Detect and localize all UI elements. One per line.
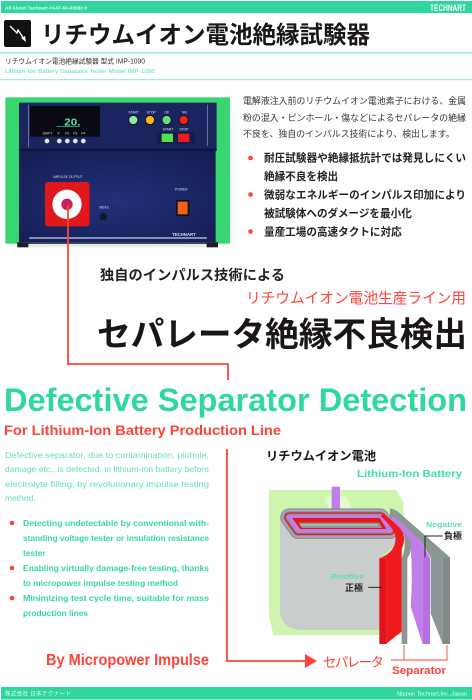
photo: tester on green background: START (163, 127, 173, 131)
feature bullets English: Minimizing test cycle time, suitable for mass (23, 593, 209, 603)
English intro text: method. (5, 493, 36, 503)
photo: tester on green background: POWER (175, 188, 188, 192)
photo: tester on green background: MEAS (99, 206, 110, 210)
label: negative electrode: Negative (426, 520, 462, 529)
photo: tester on green background: F3 (73, 132, 77, 136)
photo: tester on green background: F2 (65, 132, 69, 136)
feature bullets English: Enabling virtually damage-free testing, thanks (23, 563, 209, 573)
red connector line to separator heading (68, 205, 228, 380)
label: positive electrode: 正極 (345, 582, 363, 593)
model name: Lithium-Ion Battery Separator Tester Model IMP-1090 (5, 69, 155, 75)
English subheading: For Lithium-Ion Battery Production Line (4, 423, 282, 438)
feature bullets Japanese (248, 152, 466, 238)
feature bullets Japanese: 絶縁不良を検出 (264, 170, 338, 183)
intro text: 粉の混入・ピンホール・傷などによるセパレータの絶縁 (243, 112, 466, 123)
feature bullets English: Detecting undetectable by conventional with- (23, 518, 209, 528)
header band: All About Technart #AAT-50-00082 0 (5, 6, 87, 10)
photo: tester on green background: SHIFT (43, 132, 52, 136)
photo: tester on green background: STOP (179, 127, 189, 131)
photo: tester on green background: NG (182, 110, 187, 114)
feature bullets English: production lines (23, 608, 88, 618)
intro text (243, 95, 466, 139)
icon: lightning bolt (4, 20, 31, 47)
English intro text: Defective separator, due to contamination, pinhole, (5, 450, 209, 460)
photo: tester on green background: F (58, 132, 60, 136)
footer band: 株式会社 日本テクナート (5, 690, 71, 698)
photo: tester on green background: OK (164, 110, 170, 114)
main Japanese heading: セパレータ絶縁不良検出 (97, 316, 467, 354)
feature bullets English: tester (23, 548, 46, 558)
English intro text: damage etc., is detected, in lithium-ion battery before (5, 464, 209, 474)
feature bullets Japanese: 被試験体へのダメージを最小化 (264, 207, 412, 220)
intro text: 不良を、独自のインパルス技術により、検出します。 (243, 128, 455, 139)
label: separator Japanese: セパレータ (323, 655, 384, 670)
arrow to separator label (227, 449, 317, 668)
battery heading Japanese: リチウムイオン電池 (266, 448, 376, 463)
feature bullets Japanese: 耐圧試験器や絶縁抵抗計では発見しにくい (264, 152, 466, 164)
photo: tester on green background: START (128, 110, 139, 114)
main English heading: Defective Separator Detection (4, 382, 467, 418)
red subheading: リチウムイオン電池生産ライン用 (246, 290, 466, 307)
footer band: Nippon Technart,Inc.,Japan (397, 692, 467, 698)
photo: tester on green background (5, 97, 230, 247)
label: positive electrode: Positive (331, 572, 364, 581)
label: separator English: Separator (392, 665, 447, 677)
photo: tester on green background: STOP (147, 110, 156, 114)
separator leader lines (391, 645, 447, 660)
model name (5, 56, 155, 75)
label: positive electrode (331, 572, 364, 593)
English intro text: electrolyte filling, by revolutionary impulse testing (5, 479, 209, 489)
tagline: 独自のインパルス技術による (100, 267, 285, 284)
header band (1, 1, 472, 13)
footer band (1, 687, 472, 700)
title: リチウムイオン電池絶縁試験器 (41, 22, 370, 49)
label: negative electrode: 負極 (444, 530, 462, 541)
feature bullets Japanese: 微弱なエネルギーのインパルス印加により (264, 188, 466, 202)
photo: tester on green background: IMPULSE OUTPUT (53, 175, 83, 179)
feature bullets English: to micropower impulse testing method (23, 578, 178, 588)
battery diagram (269, 487, 450, 644)
label: negative electrode (426, 520, 462, 541)
photo: tester on green background: F4 (81, 132, 85, 136)
feature bullets Japanese: 量産工場の高速タクトに対応 (264, 226, 402, 238)
feature bullets English (10, 518, 209, 618)
feature bullets English: standing voltage tester or insulation resistance (23, 533, 209, 543)
intro text: 電解液注入前のリチウムイオン電池素子における、金属 (243, 95, 466, 106)
battery heading English: Lithium-Ion Battery (357, 468, 462, 480)
photo: tester on green background: 20. (64, 118, 81, 129)
English intro text (5, 450, 209, 503)
By Micropower Impulse: By Micropower Impulse (46, 652, 209, 669)
model name: リチウムイオン電池絶縁試験器 型式 IMP-1090 (5, 56, 145, 66)
photo: tester on green background: TECHNART (172, 232, 196, 237)
